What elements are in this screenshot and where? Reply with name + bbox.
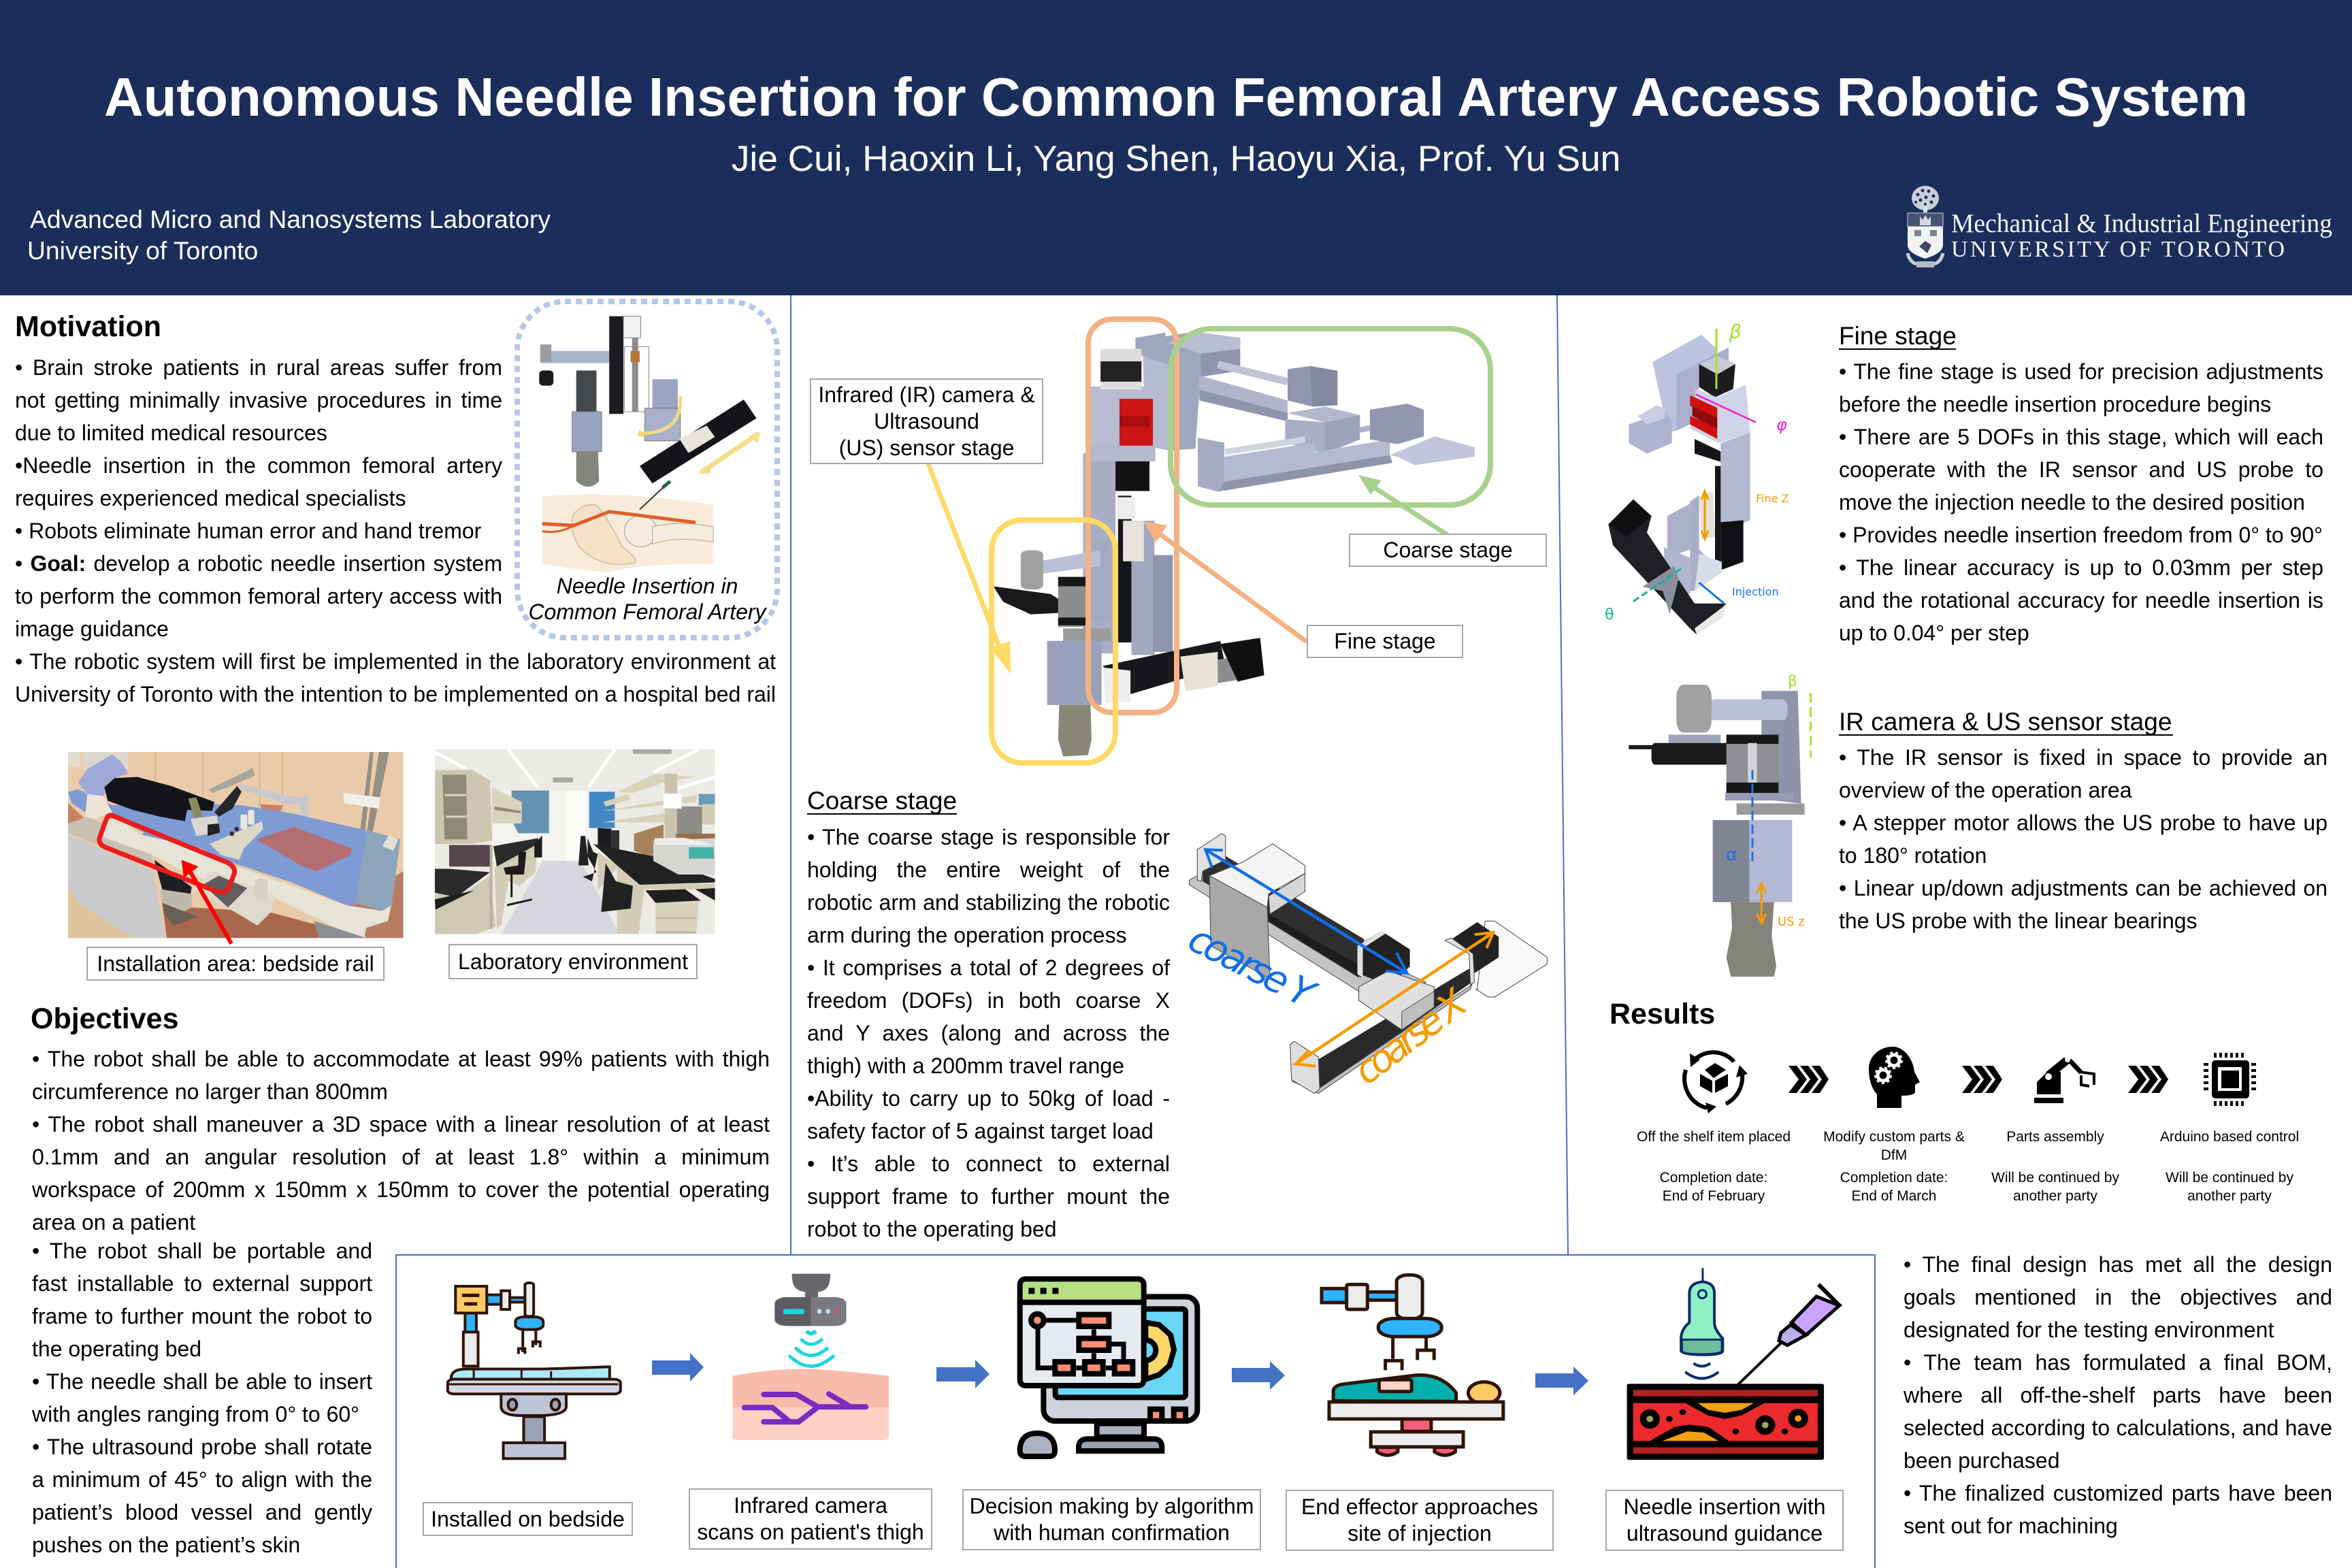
text: department: Mechanical & Industrial Engineering [1951, 209, 2332, 238]
annotation: injection arrow [1699, 583, 1724, 604]
icon: chevrons 1 [1788, 1066, 1829, 1093]
icon: microchip [2204, 1053, 2256, 1106]
arrow: step 2 to 3 [936, 1360, 990, 1388]
text block: coarse stage bullets: • It’s able to connect to external [807, 1152, 1170, 1176]
heading: IR camera and US sensor stage: IR camera & US sensor stage [1839, 708, 2172, 736]
text block: objectives top bullets: • The robot shall maneuver a 3D space with a linear resolution of at least [32, 1112, 770, 1137]
photo: installation area bedside rail [68, 752, 404, 945]
figure: full robot CAD with stage outlines [989, 316, 1493, 766]
label: installed on bedside [423, 1502, 633, 1536]
text block: objectives top bullets: • The robot shall be able to accommodate at least 99% patients with thigh [32, 1047, 770, 1071]
label: fine stage [1307, 625, 1463, 658]
panel: fine stage and IR stage [1605, 321, 2328, 1204]
milestone: custom parts [1823, 1129, 1965, 1204]
text block: fine stage bullets: before the needle insertion procedure begins [1839, 392, 2271, 416]
annotation: beta axis [1715, 329, 1717, 389]
text block: motivation bullets: not getting minimally invasive procedures in time [15, 388, 502, 412]
authors: Jie Cui, Haoxin Li, Yang Shen, Haoyu Xia, Prof. Yu Sun [732, 139, 1620, 179]
label: end effector: site of injection [1348, 1521, 1492, 1546]
text block: objectives lower bullets: pushes on the patient’s skin [32, 1533, 300, 1557]
label: coarse stage [1349, 534, 1547, 567]
text block: coarse stage bullets: and Y axes (along and across the [807, 1021, 1170, 1045]
label: end effector: End effector approaches [1301, 1494, 1538, 1519]
text block: objectives top bullets [32, 1047, 770, 1235]
heading: coarse stage: Coarse stage [807, 787, 957, 815]
caption: needle insertion: Common Femoral Artery [528, 600, 766, 624]
annotation labels: IR stage DOFs [1726, 673, 1805, 929]
milestone: Arduino control: Arduino based control [2160, 1129, 2299, 1145]
text block: coarse stage bullets: robotic arm and stabilizing the robotic [807, 890, 1170, 915]
text block: motivation bullets: University of Toronto with the intention to be implemented on a hospital bed rail [15, 682, 776, 706]
arrow: coarse stage pointer [1358, 475, 1449, 534]
arrow: coarse X [1296, 932, 1493, 1066]
text block: fine stage bullets [1839, 359, 2323, 645]
label: installation area: Installation area: bedside rail [97, 951, 374, 976]
text block: IR stage bullets: overview of the operation area [1839, 778, 2132, 802]
arrow: step 4 to 5 [1534, 1365, 1592, 1399]
text block: IR stage bullets: the US probe with the linear bearings [1839, 909, 2198, 933]
title: Autonomous Needle Insertion for Common Femoral Artery Access Robotic System [104, 67, 2248, 127]
label: infrared camera scans: Infrared camera [734, 1493, 887, 1518]
panel: workflow [395, 1254, 1876, 1568]
text block: fine stage bullets: • Provides needle insertion freedom from 0° to 90° [1839, 523, 2323, 547]
heading: fine stage: Fine stage [1839, 322, 1957, 350]
photo: laboratory environment [435, 749, 715, 934]
label: decision making [962, 1489, 1261, 1550]
annotation: beta dashed axis [1810, 693, 1812, 757]
text block: results conclusions: sent out for machining [1904, 1514, 2118, 1538]
arrow: step 1 to 2 [652, 1353, 704, 1382]
arrow: IR camera stage pointer [926, 464, 1011, 674]
text block: objectives top bullets: 0.1mm and an angular resolution of at least 1.8° within a minimum [32, 1145, 770, 1169]
panel: objectives [31, 1002, 770, 1557]
text block: results conclusions: • The finalized customized parts have been [1904, 1481, 2332, 1505]
affiliation: Advanced Micro and Nanosystems Laboratory [30, 205, 551, 233]
label: infrared camera scans: scans on patient's thigh [697, 1520, 924, 1544]
icon: crest [1908, 186, 1943, 267]
text block: fine stage bullets: move the injection needle to the desired position [1839, 490, 2305, 514]
icon: robot installed on bed [446, 1281, 622, 1460]
text block: coarse stage bullets: arm during the operation process [807, 923, 1127, 947]
text block: coarse stage bullets: • It comprises a total of 2 degrees of [807, 956, 1170, 980]
text block: coarse stage bullets: freedom (DOFs) in both coarse X [807, 988, 1170, 1013]
annotation: alpha dashed axis [1751, 770, 1753, 862]
text block: motivation bullets: • The robotic system will first be implemented in the laboratory environment at [15, 649, 776, 674]
milestone: parts assembly: Parts assembly [2006, 1129, 2104, 1145]
heading: motivation: Motivation [15, 310, 161, 343]
annotation labels: IR stage DOFs: β [1788, 673, 1797, 690]
milestone: parts assembly: another party [2013, 1188, 2097, 1204]
text block: IR stage bullets: • A stepper motor allows the US probe to have up [1839, 811, 2328, 835]
milestone: Arduino control: Will be continued by [2166, 1170, 2293, 1186]
text block: objectives lower bullets: frame to further mount the robot to [32, 1304, 372, 1328]
text block: coarse stage bullets: thigh) with a 200mm travel range [807, 1054, 1124, 1078]
text block: motivation bullets: •Needle insertion in the common femoral artery [15, 453, 502, 478]
heading: results: Results [1610, 998, 1715, 1030]
annotation: coarse Y: coarse Y [1181, 917, 1324, 1018]
label: installed on bedside: Installed on bedside [431, 1507, 625, 1531]
text block: motivation bullets: due to limited medical resources [15, 421, 327, 445]
label: infrared camera stage: Ultrasound [874, 408, 979, 433]
milestone: off the shelf [1637, 1129, 1791, 1204]
icon: end effector over patient [1321, 1275, 1512, 1472]
text block: objectives lower bullets: • The needle shall be able to insert [32, 1369, 372, 1394]
text block: objectives top bullets: circumference no larger than 800mm [32, 1079, 388, 1104]
text: university: UNIVERSITY OF TORONTO [1951, 237, 2285, 262]
text block: results conclusions: goals mentioned in the objectives and [1904, 1285, 2332, 1309]
icon: needle insertion with ultrasound [1620, 1268, 1831, 1472]
text block: IR stage bullets: • Linear up/down adjustments can be achieved on [1839, 876, 2328, 900]
figure: IR camera and US sensor stage CAD [1629, 685, 1812, 977]
text block: objectives lower bullets: fast installable to external support [32, 1271, 372, 1296]
annotation labels: fine stage DOFs: Injection [1732, 585, 1779, 598]
annotation: coarse X: coarse X [1345, 980, 1476, 1094]
text block: objectives lower bullets: the operating bed [32, 1337, 201, 1361]
text block: objectives top bullets: area on a patient [32, 1210, 195, 1235]
label: coarse stage: Coarse stage [1383, 538, 1513, 562]
arrow: step 3 to 4 [1230, 1360, 1288, 1394]
text block: IR stage bullets: • The IR sensor is fixed in space to provide an [1839, 745, 2328, 770]
label: end effector [1286, 1490, 1554, 1551]
annotation: theta axis [1633, 568, 1682, 602]
annotation labels: fine stage DOFs: φ [1776, 415, 1787, 434]
milestone: custom parts: Modify custom parts & [1823, 1129, 1965, 1145]
text block: fine stage bullets: cooperate with the IR sensor and US probe to [1839, 457, 2323, 482]
text block: fine stage bullets: • The fine stage is used for precision adjustments [1839, 359, 2323, 384]
icon: robot arm [2034, 1057, 2095, 1103]
label: infrared camera scans [689, 1488, 932, 1550]
milestone: custom parts: Completion date: [1840, 1170, 1948, 1186]
text block: fine stage bullets: up to 0.04° per step [1839, 621, 2029, 645]
affiliation [27, 205, 551, 265]
label: laboratory environment [448, 944, 698, 979]
text block: results conclusions: selected according to calculations, and have [1904, 1416, 2332, 1440]
label: decision making: Decision making by algorithm [970, 1494, 1254, 1518]
stage outlines [1088, 319, 1177, 713]
logo: University of Toronto MIE [1906, 186, 2332, 267]
icon: infrared camera scanning thigh [732, 1274, 889, 1440]
header banner [0, 0, 2352, 295]
icon: chevrons 2 [1962, 1066, 2002, 1093]
milestone: Arduino control [2160, 1129, 2299, 1204]
text block: results conclusions: • The team has formulated a final BOM, [1904, 1350, 2332, 1375]
icon: off the shelf item cycle [1682, 1050, 1748, 1113]
fine stage model [1083, 453, 1115, 653]
text block: results conclusions: where all off-the-shelf parts have been [1904, 1383, 2332, 1407]
text block: motivation bullets: requires experienced medical specialists [15, 486, 406, 510]
icon: head with gears [1869, 1047, 1920, 1108]
milestone: Arduino control: another party [2187, 1188, 2272, 1204]
annotation: US Z arrow [1757, 883, 1766, 924]
text block: fine stage bullets: • The linear accuracy is up to 0.03mm per step [1839, 555, 2323, 580]
caption: needle insertion [528, 574, 768, 624]
milestone: off the shelf: Completion date: [1660, 1170, 1767, 1186]
milestone: parts assembly: Will be continued by [1991, 1170, 2119, 1186]
coarse stage model [1135, 331, 1240, 451]
milestone: off the shelf: Off the shelf item placed [1637, 1129, 1791, 1145]
figure: fine stage CAD with DOF annotations [1608, 328, 1756, 635]
text block: objectives lower bullets: patient’s blood vessel and gently [32, 1500, 372, 1524]
IR camera and US sensor model [1090, 542, 1111, 621]
text block: results conclusions: been purchased [1904, 1448, 2060, 1473]
heading: objectives: Objectives [31, 1002, 178, 1035]
annotation: phi axis [1696, 395, 1756, 423]
text block: objectives top bullets: workspace of 200mm x 150mm x 150mm to cover the potential operating [32, 1177, 770, 1202]
icon: chevrons 3 [2128, 1066, 2168, 1093]
label: infrared camera stage [810, 378, 1043, 464]
text block: fine stage bullets: • There are 5 DOFs in this stage, which will each [1839, 425, 2323, 449]
arrow: fine stage pointer [1143, 521, 1307, 644]
annotation labels: IR stage DOFs: US z [1778, 915, 1805, 929]
annotation labels: fine stage DOFs: β [1729, 321, 1742, 343]
text block: motivation bullets [15, 355, 776, 706]
text block: objectives lower bullets: • The ultrasound probe shall rotate [32, 1435, 372, 1459]
panel: motivation [15, 299, 780, 981]
text block: motivation bullets: • Robots eliminate human error and hand tremor [15, 519, 481, 543]
milestone: parts assembly [1991, 1129, 2119, 1204]
annotation labels: IR stage DOFs: α [1726, 845, 1737, 865]
text block: coarse stage bullets: • The coarse stage is responsible for [807, 825, 1170, 849]
text block: coarse stage bullets: support frame to further mount the [807, 1184, 1170, 1209]
text block: results conclusions: designated for the testing environment [1904, 1318, 2274, 1342]
text block: coarse stage bullets: •Ability to carry up to 50kg of load - [807, 1086, 1170, 1111]
text block: IR stage bullets: to 180° rotation [1839, 843, 1987, 868]
panel: robot overview and coarse stage [807, 316, 1548, 1241]
milestone: custom parts: DfM [1881, 1147, 1907, 1163]
text block: results conclusions: • The final design has met all the design [1904, 1252, 2332, 1277]
label: fine stage: Fine stage [1334, 629, 1436, 653]
milestone: off the shelf: End of February [1663, 1188, 1765, 1204]
text block: motivation bullets: image guidance [15, 617, 169, 641]
label: infrared camera stage: (US) sensor stage [839, 436, 1014, 460]
text block: motivation bullets: • Brain stroke patients in rural areas suffer from [15, 355, 502, 380]
figure: needle insertion in common femoral artery [514, 299, 780, 640]
arrow: coarse Y [1205, 849, 1407, 973]
affiliation: University of Toronto [27, 236, 258, 265]
label: decision making: with human confirmation [994, 1520, 1230, 1545]
figure: coarse X and Y axes [1181, 833, 1548, 1094]
annotation: fine Z arrow [1701, 491, 1708, 539]
text block: results conclusions [1904, 1248, 2332, 1542]
label: needle insertion [1605, 1490, 1844, 1551]
text block: objectives lower bullets: • The robot shall be portable and [32, 1239, 372, 1263]
milestone: custom parts: End of March [1852, 1188, 1936, 1204]
icon: computer flowchart [1014, 1275, 1218, 1473]
text block: coarse stage bullets: robot to the operating bed [807, 1217, 1056, 1241]
text block: objectives lower bullets: a minimum of 45° to align with the [32, 1467, 372, 1492]
label: infrared camera stage: Infrared (IR) camera & [818, 382, 1035, 407]
label: needle insertion: ultrasound guidance [1627, 1521, 1823, 1546]
text block: coarse stage bullets [807, 825, 1171, 1241]
label: installation area [86, 947, 385, 981]
annotation labels: fine stage DOFs [1605, 321, 1789, 623]
label: needle insertion: Needle insertion with [1623, 1494, 1826, 1519]
dashed frame and robot illustration [514, 299, 780, 640]
text block: objectives lower bullets: with angles ranging from 0° to 60° [32, 1402, 359, 1426]
caption: needle insertion: Needle Insertion in [557, 574, 738, 598]
text block: motivation bullets: to perform the common femoral artery access with [15, 584, 502, 608]
text block: coarse stage bullets: holding the entire weight of the [807, 858, 1170, 882]
annotation labels: fine stage DOFs: Fine Z [1756, 492, 1789, 505]
text block: fine stage bullets: and the rotational accuracy for needle insertion is [1839, 588, 2323, 612]
text block: IR stage bullets [1839, 745, 2328, 933]
label: laboratory environment: Laboratory environment [458, 949, 688, 973]
text block: coarse stage bullets: safety factor of 5 against target load [807, 1119, 1154, 1143]
text block: motivation bullets: • Goal: develop a robotic needle insertion system [15, 551, 502, 576]
text block: objectives lower bullets [32, 1239, 372, 1557]
annotation labels: fine stage DOFs: θ [1605, 606, 1614, 623]
